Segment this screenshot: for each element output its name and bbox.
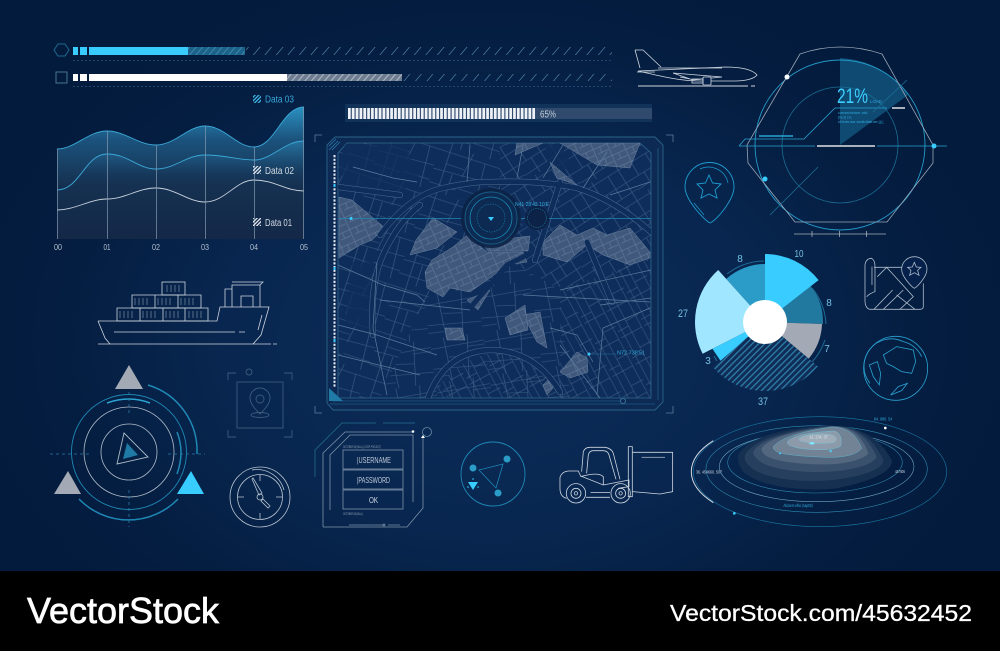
icon: folded map with pin bbox=[865, 257, 927, 309]
legend: data 02: Data 02 bbox=[265, 166, 294, 177]
terrain contour chart: 84. 886. 54 bbox=[874, 417, 893, 422]
gauge caption: LOAD bbox=[870, 99, 883, 104]
gauge note: chinensa sedidiatum:(((; bbox=[838, 120, 884, 124]
loading bar 65% bbox=[345, 104, 652, 122]
gauge note: consectetuer adi; bbox=[838, 111, 868, 115]
terrain contour chart: 36. 454660. 507 bbox=[696, 469, 722, 474]
triangle: top bbox=[115, 365, 143, 389]
gauge note bbox=[838, 111, 884, 124]
contour layers bbox=[738, 426, 892, 489]
progress bar: blue bbox=[54, 44, 612, 60]
icon: star pin bbox=[685, 162, 734, 223]
gauge note: (fed) cn; bbox=[838, 116, 852, 120]
axis labels: 00 bbox=[54, 242, 62, 252]
pie labels: 7 bbox=[824, 344, 830, 355]
pie chart bbox=[678, 249, 832, 408]
triangle: left bbox=[54, 471, 81, 494]
icon: airplane bbox=[635, 50, 757, 86]
small radar target bbox=[525, 206, 549, 230]
radar gauge 21% bbox=[739, 47, 947, 237]
contour labels: 12. 234. 37 bbox=[809, 434, 828, 439]
pie labels: 10 bbox=[794, 249, 804, 260]
pie outer arcs bbox=[714, 261, 826, 362]
gauge value: 21% bbox=[837, 85, 868, 108]
triangle: right bbox=[177, 471, 204, 494]
icon: network circle bbox=[461, 442, 525, 506]
terrain contour chart: 447006 bbox=[895, 469, 905, 474]
login panel bbox=[315, 423, 432, 527]
axis labels: 05 bbox=[300, 242, 308, 252]
radar compass bbox=[50, 365, 205, 527]
gauge ruler bbox=[794, 231, 886, 237]
progress bar: white bbox=[56, 72, 612, 86]
crosshair line bbox=[339, 218, 651, 220]
icon: clock bbox=[230, 467, 290, 527]
icon: globe bbox=[864, 336, 928, 400]
panel: city map bbox=[315, 135, 673, 413]
map ticks bbox=[334, 155, 336, 387]
legend: data 02 bbox=[253, 166, 294, 177]
legend: data 03 bbox=[253, 94, 294, 106]
icon: location box bbox=[228, 369, 292, 437]
field: password: |PASSWORD bbox=[357, 475, 390, 485]
field: username: |USERNAME bbox=[357, 455, 391, 465]
axis labels: 04 bbox=[250, 242, 258, 252]
terrain contour chart: Abicwm elho (sap50) bbox=[783, 503, 813, 508]
icon: cargo ship bbox=[98, 282, 277, 344]
map streets bbox=[338, 143, 651, 398]
area chart: data 01 to 03 bbox=[54, 94, 308, 252]
login small caption top: OCTOBER 88 (NULL) (COSP-PROJECT) bbox=[343, 445, 381, 449]
loading bar 65%: 65% bbox=[540, 110, 556, 120]
map marker: south east: N72 738'51 bbox=[617, 350, 645, 356]
icon: forklift bbox=[560, 447, 673, 503]
footer band bbox=[0, 571, 1000, 651]
axis labels: 03 bbox=[201, 242, 209, 252]
pie labels bbox=[678, 249, 832, 408]
pie labels: 8 bbox=[826, 298, 832, 309]
map building blocks bbox=[339, 143, 650, 395]
legend: data 01: Data 01 bbox=[265, 218, 292, 229]
button: ok: OK bbox=[369, 495, 378, 505]
legend: data 03: Data 03 bbox=[265, 94, 294, 106]
pie labels: 37 bbox=[758, 396, 768, 408]
map roads bbox=[338, 182, 651, 398]
map frame bbox=[327, 137, 663, 410]
pie labels: 3 bbox=[705, 356, 711, 367]
footer brand name: VectorStock bbox=[27, 590, 220, 631]
radar target on map bbox=[461, 188, 521, 248]
map marker: south east bbox=[588, 350, 645, 356]
pie labels: 27 bbox=[678, 308, 688, 320]
contour dots bbox=[809, 442, 815, 445]
axis labels: 01 bbox=[104, 242, 111, 252]
orbit rings bbox=[693, 417, 947, 527]
pie labels: 8 bbox=[737, 254, 743, 265]
login small caption bottom: OCTOBER 88 (NULL) bbox=[343, 512, 363, 516]
terrain contour chart bbox=[691, 417, 947, 527]
legend: data 01 bbox=[253, 218, 292, 229]
map label: north: N41 28'43.10'E bbox=[515, 202, 550, 208]
footer image id: VectorStock.com/45632452 bbox=[670, 600, 972, 626]
axis labels: 02 bbox=[152, 242, 160, 252]
axis labels bbox=[54, 242, 308, 252]
